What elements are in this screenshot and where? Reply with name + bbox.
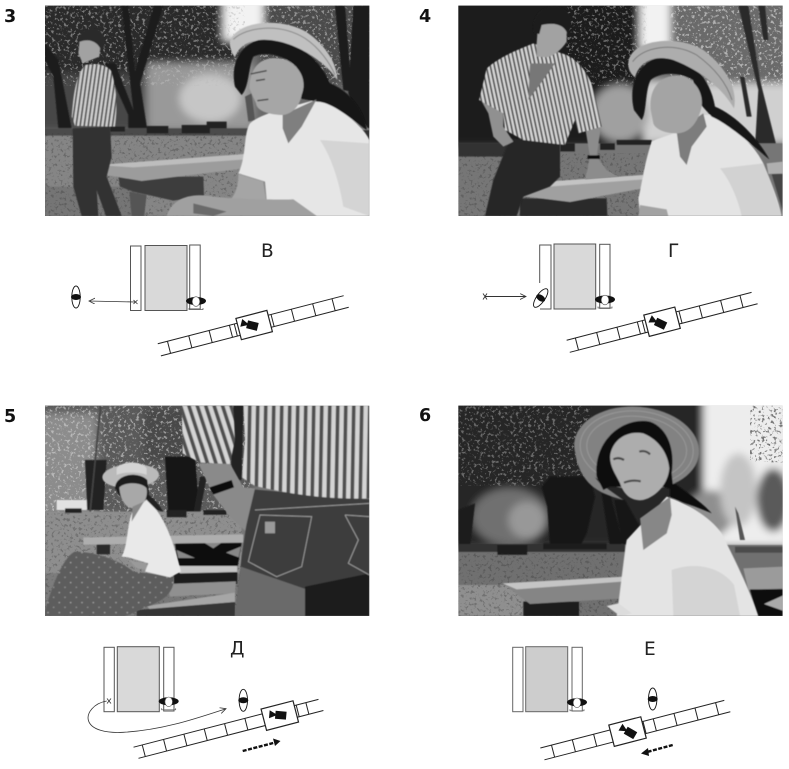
man	[72, 29, 122, 216]
label Д: Д	[230, 638, 244, 660]
photo 4: man leaning on table	[443, 0, 789, 216]
label: number 5: 5	[4, 407, 16, 427]
icon: woman	[186, 297, 206, 310]
arrow: dolly moves right	[243, 738, 280, 751]
photo 3: man behind woman at table	[33, 0, 380, 216]
icon: man	[238, 689, 248, 711]
icon: camera	[240, 319, 259, 331]
arrow: man's path	[483, 294, 526, 300]
woman	[571, 401, 758, 616]
label Е: Е	[644, 639, 656, 660]
label: number 4: 4	[419, 7, 431, 27]
label Г: Г	[668, 241, 679, 262]
camera track and dolly	[132, 694, 325, 764]
benches and table	[104, 647, 174, 712]
benches and table	[513, 647, 582, 712]
camera track and dolly	[539, 695, 731, 764]
diagram В: top view of table and camera track	[71, 241, 350, 360]
icon: camera	[269, 710, 287, 720]
camera track and dolly	[157, 290, 350, 360]
arrow: man's path	[89, 300, 138, 304]
man	[479, 6, 618, 216]
woman	[628, 41, 782, 216]
diagram Г: top view of table and camera track	[483, 241, 759, 357]
foreground man	[182, 406, 369, 616]
icon: camera	[648, 315, 667, 330]
photo 6: woman looking up	[458, 406, 783, 616]
arrow: man's curved path	[88, 698, 226, 732]
icon: camera	[619, 724, 637, 739]
bench	[83, 534, 243, 616]
table	[98, 154, 245, 216]
icon: man	[71, 286, 81, 308]
label В: В	[261, 241, 274, 262]
photo 5: woman on bench, man in foreground	[33, 393, 369, 616]
table	[498, 162, 783, 216]
icon: woman	[159, 697, 179, 710]
camera track and dolly	[565, 287, 759, 357]
label: number 3: 3	[4, 7, 16, 27]
label: number 6: 6	[419, 406, 431, 426]
icon: man	[648, 688, 658, 710]
seated woman	[45, 463, 181, 616]
arrow: dolly moves left	[641, 745, 673, 756]
icon: woman	[595, 295, 615, 308]
table	[503, 567, 783, 616]
diagram Д: top view of table and camera track	[88, 638, 325, 764]
icon: woman	[567, 698, 587, 711]
woman	[167, 23, 369, 216]
diagram Е: top view of table and camera track	[513, 639, 731, 764]
benches and table	[130, 245, 200, 310]
icon: man	[530, 286, 551, 310]
benches and table	[540, 244, 610, 309]
